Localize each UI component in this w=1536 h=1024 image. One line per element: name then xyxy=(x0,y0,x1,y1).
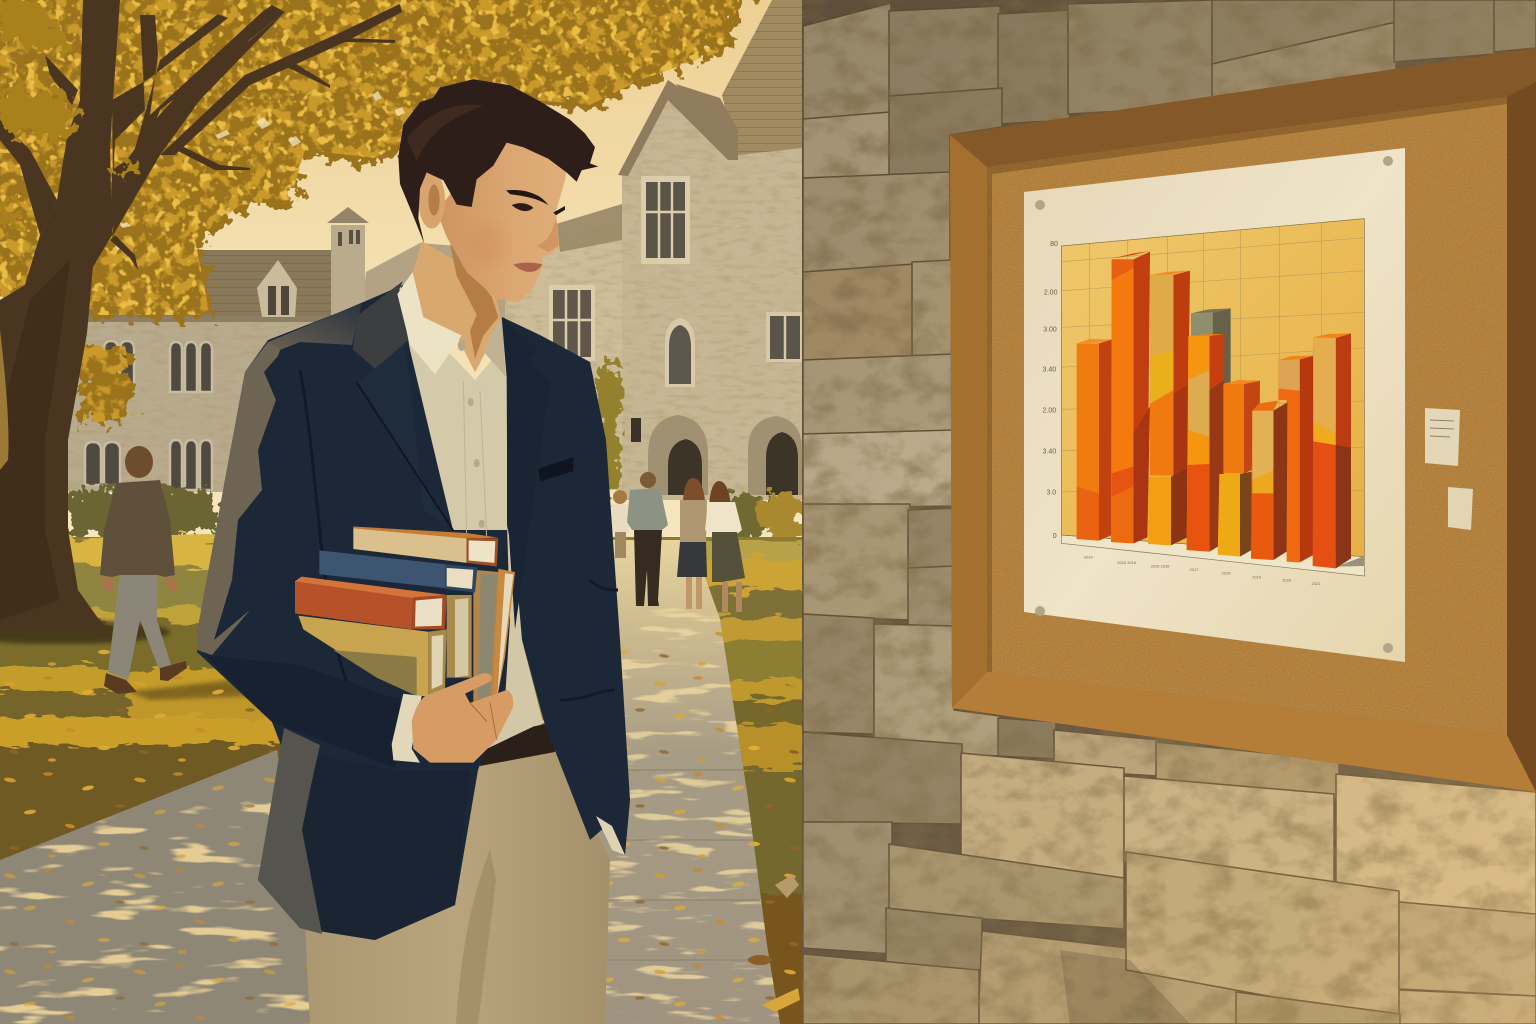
far right limb xyxy=(160,4,402,155)
x axis labels xyxy=(1084,555,1321,586)
hand xyxy=(412,673,513,763)
grey bar xyxy=(1191,308,1231,383)
neck shadow xyxy=(450,244,498,358)
group of distant students xyxy=(612,472,745,612)
shirt buttons xyxy=(458,340,485,528)
book: upright cream xyxy=(492,569,515,703)
bar 4 xyxy=(1187,334,1224,552)
coat xyxy=(100,480,175,577)
side wing wall xyxy=(505,222,622,490)
bar chart xyxy=(1043,219,1364,586)
trunk shadow and bark xyxy=(0,260,70,620)
paper xyxy=(1024,148,1405,662)
sky xyxy=(0,0,802,560)
ear xyxy=(418,172,445,229)
walking student in distance xyxy=(100,446,187,694)
x axis labels: 2018 xyxy=(1222,571,1231,576)
noticeboard xyxy=(950,48,1536,792)
lit jacket hem xyxy=(258,728,322,934)
mortar background xyxy=(802,0,1536,1024)
path leaves xyxy=(600,630,780,1024)
tan upper roof xyxy=(722,0,802,160)
main right limb xyxy=(110,5,285,237)
leaf tufts over limbs xyxy=(0,0,140,230)
path surface xyxy=(590,540,780,1024)
bar 3 lower xyxy=(1148,468,1187,545)
sidewalk surface xyxy=(0,750,320,1024)
book: gold xyxy=(298,616,447,696)
arched window xyxy=(665,318,695,387)
shirt collar right xyxy=(477,317,506,377)
stone texture on hall xyxy=(505,86,802,500)
jacket front lower panel xyxy=(258,750,470,940)
hedge xyxy=(68,486,215,535)
left building wall xyxy=(68,316,408,492)
pins xyxy=(1035,156,1393,653)
x axis labels: 2019 xyxy=(1252,574,1262,579)
tree trunk and limbs xyxy=(0,0,402,632)
jacket body xyxy=(197,285,630,940)
right window xyxy=(766,312,802,362)
belt xyxy=(478,722,555,766)
narrow tree xyxy=(593,360,623,500)
student in white blouse and dark skirt xyxy=(705,481,745,612)
note 1 xyxy=(1425,408,1460,466)
shoulder highlight band xyxy=(268,303,362,350)
book: upright grey xyxy=(473,570,498,705)
shirt cuff xyxy=(392,694,422,763)
student in white xyxy=(612,490,629,558)
right cuff xyxy=(596,816,625,855)
paving seams xyxy=(600,770,770,960)
stone mottling xyxy=(802,0,1536,1024)
lawn leaves xyxy=(0,640,280,870)
trunk xyxy=(0,0,120,632)
finger lines xyxy=(470,703,497,740)
hair xyxy=(398,79,598,244)
bar 5 lower xyxy=(1218,472,1252,557)
jacket sleeve crease xyxy=(280,370,618,700)
side wing roof xyxy=(556,204,622,252)
background: main hall xyxy=(505,0,804,542)
strip bands xyxy=(705,540,802,1024)
x axis labels: 2017 xyxy=(1190,567,1199,572)
shirt below books xyxy=(480,525,543,752)
hands xyxy=(101,577,178,592)
bar 6 xyxy=(1251,401,1287,560)
book: red xyxy=(295,577,447,629)
bar 2 xyxy=(1111,251,1150,543)
main hall wall xyxy=(622,86,802,500)
background: left college building xyxy=(68,207,505,535)
canopy mid tone xyxy=(0,0,745,425)
shoes xyxy=(104,661,187,694)
upper body details xyxy=(295,79,598,763)
book: upright tan xyxy=(447,595,472,678)
placket xyxy=(463,381,487,538)
cork surface xyxy=(987,97,1507,735)
face xyxy=(437,124,567,302)
shadow at tree base xyxy=(0,620,170,644)
left building windows xyxy=(85,341,212,490)
book: cream xyxy=(353,527,498,566)
head xyxy=(125,446,153,478)
y axis labels: 3.40 xyxy=(1043,367,1056,374)
path sunlight streaks xyxy=(606,608,779,1024)
gable roof xyxy=(618,80,738,176)
right lapel xyxy=(502,317,550,629)
trousers xyxy=(108,572,172,680)
y axis labels: 2.00 xyxy=(1043,407,1056,414)
trousers xyxy=(305,748,610,1024)
y axis labels: 3.00 xyxy=(1043,327,1057,334)
bar shadow xyxy=(1337,556,1364,567)
hair highlight xyxy=(407,105,483,161)
grass strip beside path xyxy=(705,540,802,1024)
y axis labels: 0 xyxy=(1053,533,1057,540)
student in tan top and navy skirt xyxy=(677,478,707,609)
student in grey shirt xyxy=(627,472,668,606)
main path xyxy=(590,540,780,1024)
bar 5 upper xyxy=(1223,380,1260,473)
bar 3 upper xyxy=(1150,271,1190,476)
wall lamp xyxy=(631,418,641,442)
debris at wall base xyxy=(748,875,800,1012)
lawn xyxy=(0,537,802,1024)
wall lighting xyxy=(802,0,1536,1024)
chart poster xyxy=(1024,148,1405,662)
frame right xyxy=(1507,82,1536,792)
y axis labels: 3.0 xyxy=(1046,490,1056,497)
cork inner shadow xyxy=(987,97,1507,672)
eye xyxy=(512,203,533,211)
y axis labels: 2.00 xyxy=(1044,290,1058,297)
cork grain xyxy=(987,97,1507,735)
tower xyxy=(327,207,369,315)
pocket square xyxy=(538,457,573,482)
tree canopy base xyxy=(0,0,760,425)
floor xyxy=(1061,535,1364,576)
sky flecks through canopy xyxy=(115,91,405,250)
book: blue xyxy=(319,550,477,593)
left lapel xyxy=(353,281,453,531)
fallen leaf bottom xyxy=(762,988,800,1012)
eyebrows xyxy=(506,190,565,215)
lawn base xyxy=(0,537,802,1024)
wooden frame xyxy=(950,48,1536,792)
diagonal cast shadow xyxy=(1060,950,1190,1024)
bar 7 xyxy=(1278,356,1313,562)
fallen leaf brown xyxy=(748,955,772,965)
arched doorways xyxy=(648,415,802,495)
y axis labels: 80 xyxy=(1050,241,1058,248)
jacket sunlit shoulder xyxy=(197,338,284,655)
upper left limb xyxy=(0,120,57,235)
branch stub left xyxy=(45,55,78,105)
shirt xyxy=(398,282,507,530)
roof courses xyxy=(82,250,348,318)
foreground student xyxy=(197,79,630,1024)
y axis labels xyxy=(1043,241,1058,540)
trunk sunlit edge xyxy=(0,330,9,470)
wall brick texture xyxy=(68,316,408,492)
cheek blush xyxy=(467,223,507,264)
walker cast shadow xyxy=(130,680,270,700)
canopy bright leaves xyxy=(0,0,745,315)
left building roof xyxy=(82,250,348,318)
x axis labels: 2016 2016 xyxy=(1151,563,1170,568)
bar 1 xyxy=(1077,339,1112,541)
strip leaves xyxy=(748,708,799,974)
fallen leaf large xyxy=(775,875,799,898)
x axis labels: 2014 xyxy=(1084,555,1094,560)
neck xyxy=(413,241,502,372)
y axis labels: 3.40 xyxy=(1043,448,1056,455)
note 2 xyxy=(1448,487,1473,530)
stone blocks xyxy=(803,0,1536,1024)
back wall xyxy=(1061,219,1364,557)
side wing window xyxy=(549,285,595,361)
shirt lower xyxy=(470,680,545,762)
dormers xyxy=(168,252,297,317)
lower left sidewalk xyxy=(0,750,320,1024)
far roof and wing xyxy=(362,243,505,330)
eaves line xyxy=(84,316,354,322)
main window xyxy=(641,176,690,264)
sidewalk leaves xyxy=(4,778,308,1020)
sleeve underside xyxy=(205,655,400,768)
frame bottom xyxy=(952,672,1536,792)
lawn bands of light and shade xyxy=(0,537,320,874)
mouth xyxy=(513,263,542,272)
nose shadow xyxy=(537,218,559,252)
stone wall xyxy=(802,0,1536,1024)
frame left xyxy=(950,135,987,708)
x axis labels: 2015 2016 xyxy=(1117,560,1137,565)
frame top xyxy=(950,48,1536,167)
shirt collar left xyxy=(397,272,462,375)
bar 8 xyxy=(1313,333,1351,568)
x axis labels: 2021 xyxy=(1312,581,1321,586)
x axis labels: 2020 xyxy=(1282,577,1292,582)
sidewalk sunlight xyxy=(0,800,320,1024)
bushes xyxy=(725,491,769,539)
thin twigs xyxy=(110,38,395,270)
